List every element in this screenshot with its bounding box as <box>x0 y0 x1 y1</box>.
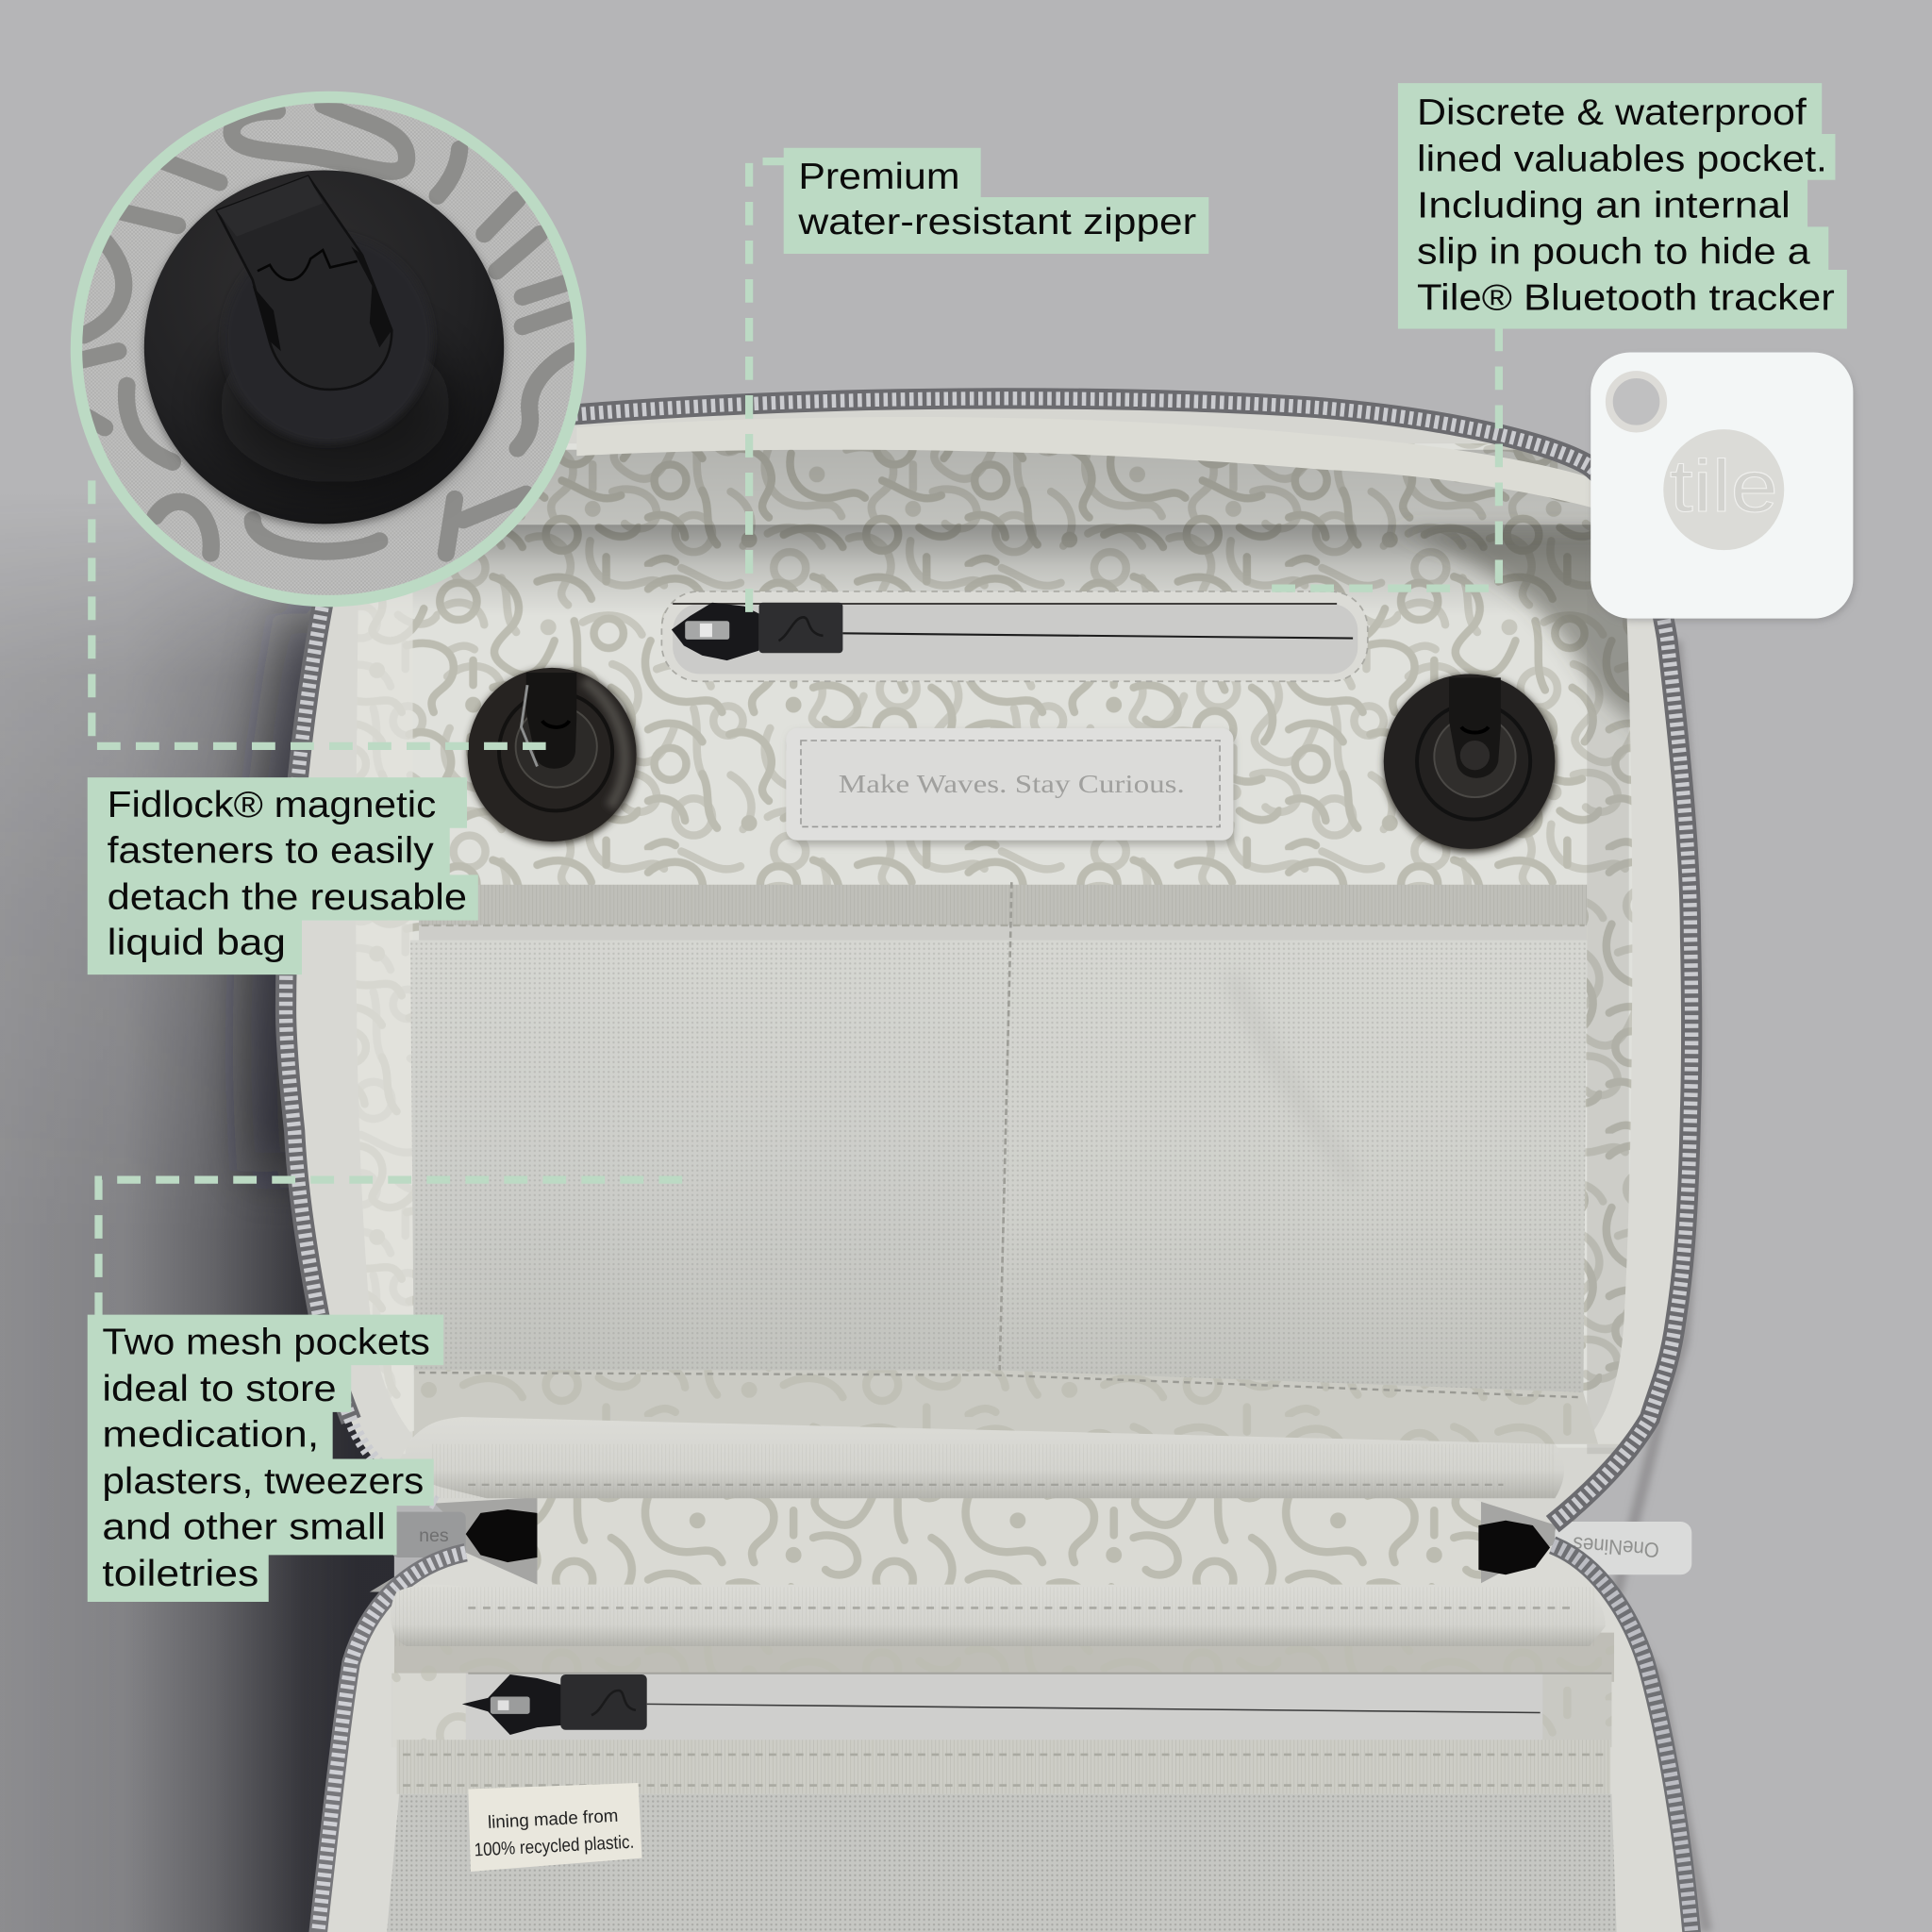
right brand tag: OneNines: OneNines <box>1573 1532 1660 1562</box>
left brand tag: nes <box>419 1525 449 1546</box>
callout text: fasteners to easily <box>108 830 434 871</box>
hinge pattern panel <box>537 1493 1481 1592</box>
callout: fidlock fasteners <box>88 777 478 974</box>
zip end: left <box>466 1509 537 1562</box>
hinge section between the two halves <box>370 1489 1691 1602</box>
upper bag binding <box>286 398 1691 1524</box>
upper bag section <box>271 398 1700 1524</box>
callout background <box>784 148 1208 254</box>
fabric wave pattern <box>83 105 573 553</box>
upper zipper <box>286 398 1691 1524</box>
callout background <box>88 1315 443 1602</box>
top wall shading <box>413 449 1591 603</box>
hinge woven fabric <box>370 1489 1614 1602</box>
valuables pocket slot with zip <box>661 591 1368 681</box>
callout text: Fidlock® magnetic <box>108 785 436 825</box>
callout text: medication, <box>102 1414 319 1455</box>
circle green ring <box>76 97 580 601</box>
callout text <box>102 1322 430 1594</box>
dark contact shadow along the bag edge <box>282 616 323 1171</box>
callout dashed line: mesh pockets <box>98 1180 696 1316</box>
callout: valuables pocket <box>1398 83 1847 328</box>
right brand tag: OneNines <box>1555 1522 1691 1574</box>
lower bag section <box>318 1545 1694 1932</box>
icon: Tile Bluetooth tracker <box>1591 353 1855 621</box>
bag cast shadow on the left <box>0 468 394 1932</box>
callout text <box>1417 92 1835 318</box>
callout text: Discrete & waterproof <box>1417 92 1807 133</box>
lower top binding <box>391 1584 1606 1646</box>
zoom circle: fidlock magnetic fastener close-up <box>61 86 591 616</box>
shaded right side wall <box>1587 591 1629 1454</box>
callout text: toiletries <box>102 1554 258 1594</box>
embossed patch: Make Waves. Stay Curious.: Make Waves. Stay Curious. <box>839 770 1185 798</box>
icon: Tile Bluetooth tracker: tile <box>1670 444 1778 527</box>
soft shadow on the right of the bag <box>1614 641 1707 1932</box>
mesh pocket: right <box>995 941 1587 1398</box>
fastener disc <box>143 171 506 527</box>
lower pattern band <box>394 1633 1614 1682</box>
callout text: lined valuables pocket. <box>1417 140 1827 180</box>
callout text: plasters, tweezers <box>102 1461 424 1502</box>
callout text <box>108 785 467 963</box>
lower webbing band <box>397 1740 1610 1794</box>
callout text: liquid bag <box>108 923 286 963</box>
callout dashed line: valuables pocket <box>1269 327 1499 589</box>
callout text: Two mesh pockets <box>102 1322 430 1362</box>
left brand tag <box>391 1512 466 1557</box>
shadow in top right corner <box>1407 519 1630 734</box>
lower pattern band of upper half <box>414 1370 1598 1444</box>
pale left side wall <box>351 591 413 1454</box>
fidlock fastener: left <box>468 668 639 844</box>
top binding band <box>576 417 1592 508</box>
callout text: detach the reusable <box>108 877 467 918</box>
callout text <box>797 157 1196 242</box>
callout background <box>88 777 478 974</box>
callout text: water-resistant zipper <box>797 202 1196 242</box>
mesh pocket: left <box>410 941 1010 1375</box>
label: recycled plastic: lining made from <box>487 1807 619 1833</box>
pocket divider seam <box>998 882 1011 1436</box>
fastener slot <box>217 176 391 390</box>
zipper pull: lower pocket <box>462 1674 647 1735</box>
lower bag zipper <box>318 1545 1691 1932</box>
circle fabric background <box>82 103 575 595</box>
right side binding <box>1594 619 1666 1443</box>
fidlock fastener: right <box>1384 674 1557 853</box>
callout: mesh pockets <box>88 1315 443 1602</box>
callout text: ideal to store <box>102 1369 337 1409</box>
valuables pocket panel with zip line <box>391 1674 1611 1747</box>
callout background <box>1398 83 1847 328</box>
upper interior patterned lining <box>351 443 1632 1458</box>
zip end: right <box>1478 1521 1550 1574</box>
label: recycled plastic <box>468 1783 641 1872</box>
callout text: Premium <box>798 157 959 197</box>
label: recycled plastic: 100% recycled plastic. <box>474 1832 635 1861</box>
left side binding <box>330 606 409 1458</box>
callout: premium zipper <box>784 148 1208 254</box>
embossed patch: Make Waves. Stay Curious. <box>786 728 1235 845</box>
callout text: Tile® Bluetooth tracker <box>1417 277 1835 318</box>
callout text: slip in pouch to hide a <box>1417 232 1810 273</box>
callout dashed line: zipper <box>749 161 786 612</box>
callout text: Including an internal <box>1417 186 1790 226</box>
callout dashed line: fidlock fastener <box>92 480 546 746</box>
callout text: and other small <box>102 1507 386 1547</box>
zipper pull: valuables pocket <box>672 603 842 660</box>
upper front binding <box>406 1417 1564 1498</box>
lower mesh pocket <box>387 1794 1617 1932</box>
webbing band <box>419 885 1587 941</box>
lower bag binding <box>318 1545 1694 1932</box>
